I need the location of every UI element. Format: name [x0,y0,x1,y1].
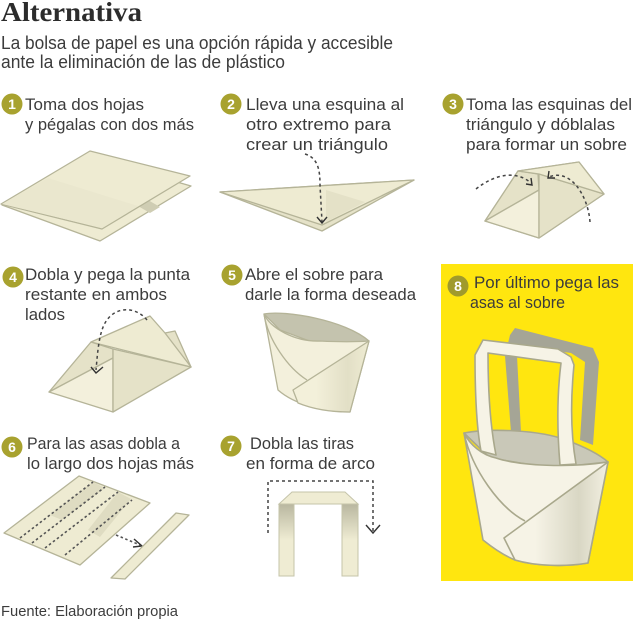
step 7 illustration: arch [279,492,358,576]
step 4 text [25,265,191,324]
step 6 [2,434,194,579]
step 8 illustration: finished bag [464,328,608,565]
step 3 text: para formar un sobre [466,135,627,154]
step 4 badge: 4 [9,269,17,285]
step 1 illustration: folded sheets [1,151,191,241]
bag interior [464,430,608,468]
bag body [464,433,608,565]
step 7 text: en forma de arco [246,454,375,473]
step 5 text: darle la forma deseada [245,285,417,304]
step 6 badge: 6 [8,439,16,455]
step 7 text: Dobla las tiras [250,434,354,453]
step 3 text: triángulo y dóblalas [466,115,615,134]
step 7 arrow [268,481,380,533]
step 4 text: restante en ambos [25,285,167,304]
step 2 [220,94,414,231]
step 1 text: y pégalas con dos más [25,115,194,134]
back handle [505,328,599,445]
front handle [475,340,576,465]
step 7 text [246,434,375,473]
subtitle [1,33,393,72]
step 2 text [246,95,404,154]
step 6 arrow [116,535,142,547]
step 6 text [27,434,194,473]
step 7 [220,434,380,576]
step 3 arrows [476,171,590,222]
step 2 arrow [305,154,327,223]
step 5 badge: 5 [228,267,236,283]
step 1 text: Toma dos hojas [25,95,144,114]
step 3 text: Toma las esquinas del [466,95,632,114]
source: Fuente: Elaboración propia [1,603,179,620]
subtitle: La bolsa de papel es una opción rápida y accesible [1,33,393,53]
yellow background [441,264,633,581]
front flap [504,462,608,565]
step 6 text: lo largo dos hojas más [27,454,194,473]
step 2 text: crear un triángulo [246,135,388,154]
step 8 badge: 8 [454,278,462,294]
step 3 illustration: envelope [485,162,604,238]
step 4 badge [2,266,24,288]
step 6 text: Para las asas dobla a [27,434,181,453]
step 8 badge [448,276,468,296]
step 7 badge [220,436,242,456]
step 4 text: lados [25,305,65,324]
step 7 badge: 7 [227,438,235,454]
step 8 text: asas al sobre [470,293,565,312]
step 8 panel [441,264,633,581]
step 4 arrow [91,310,147,373]
step 6 illustration: strip [111,513,189,579]
step 2 text: otro extremo para [246,115,392,134]
step 2 text: Lleva una esquina al [246,95,404,114]
step 3 badge: 3 [449,96,457,112]
step 6 illustration: sheet with fold lines [4,476,150,565]
subtitle: ante la eliminación de las de plástico [1,52,285,72]
step 1 [1,94,194,241]
step 3 badge [442,94,464,114]
step 8 text [470,273,619,312]
step 2 badge: 2 [227,96,235,112]
step 4 text: Dobla y pega la punta [25,265,191,284]
step 5 text [245,265,417,304]
step 4 [2,265,191,412]
step 8 text: Por último pega las [474,273,619,292]
step 3 text [466,95,632,154]
step 1 badge: 1 [8,96,16,112]
step 5 badge [222,264,242,286]
step 3 [442,94,632,238]
step 2 illustration: triangle [220,180,414,231]
step 1 badge [2,94,22,114]
step 5 illustration: open envelope [264,313,369,412]
step 5 text: Abre el sobre para [245,265,384,284]
step 6 badge [2,436,22,458]
step 4 illustration: envelope with flap [49,316,191,412]
step 1 text [25,95,194,134]
step 2 badge [220,94,242,114]
step 5 [222,264,417,412]
